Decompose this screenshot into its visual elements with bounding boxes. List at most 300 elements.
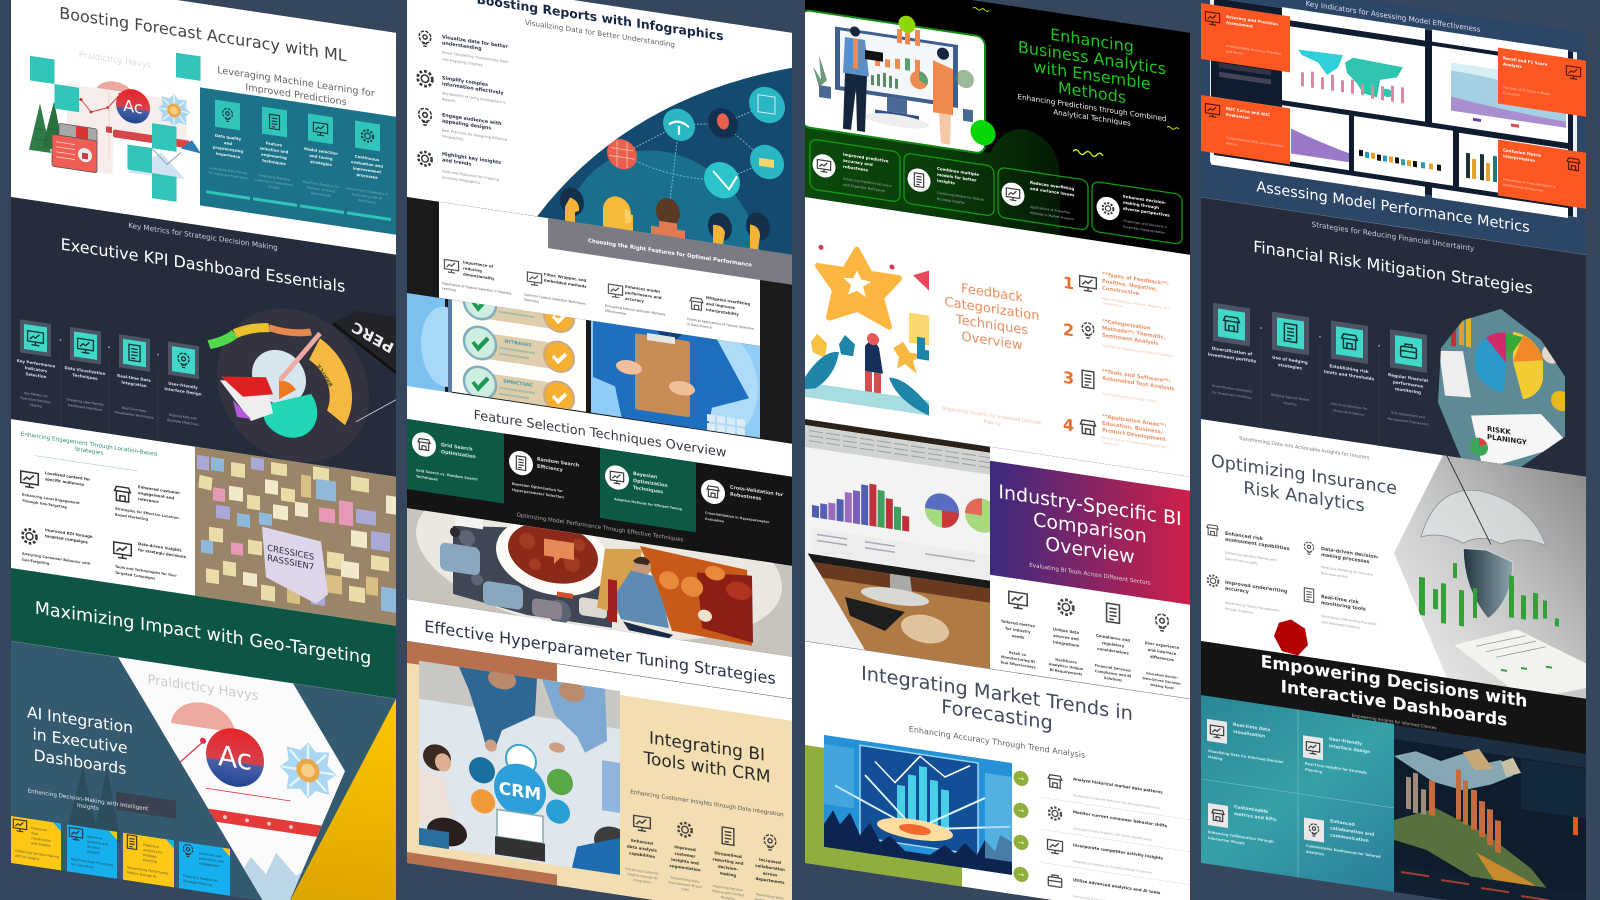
feature cards: Methods in Market Analysis [1030,211,1074,221]
cells: Bayesian [633,471,658,481]
sector columns: Solutions [1104,676,1122,683]
benefits list: Data-driven decision- [1321,546,1379,561]
benefits list: Strategies for Effective Location- [115,507,180,520]
technique items: Importance of Feature Selection in Machine [442,281,511,296]
panel: teal steps: Techniques [357,198,376,205]
numbered list: Education, Business, [1102,421,1163,436]
subtitle: Visualizing Data for Better Understanding [525,18,675,49]
benefits list: specific audiences [45,476,85,487]
KPI columns: Real-Time Data [122,406,146,413]
strategy columns: Insurance Solutions for [1331,401,1368,411]
photo: infographic plate with man [407,508,792,657]
numbered list: Methods**: Thematic, [1102,326,1166,341]
panel: teal steps: Data quality [215,133,242,142]
panel: teal steps: Feature [266,140,283,148]
image: checklist: SMRICTOAC [503,378,534,389]
illustration: Praldicticy Havys [79,50,152,71]
technique items: Practical Applications of Feature Selection [687,317,754,331]
feature cards [810,139,1182,245]
feature boxes: support [87,849,100,855]
trend list: Analyzing Consumer Behavior for Accurate Predictions [1073,793,1160,810]
cells: Grid Search [441,442,473,453]
cells: Techniques [633,485,663,495]
teal benefits grid: Enhanced [1330,818,1355,828]
cells: Optimization [633,478,668,489]
slide: Optimizing Insurance Risk Analytics [1201,419,1596,710]
image: checklist [407,293,586,412]
sector columns: and interface [1148,647,1177,656]
feature columns: reporting and [712,856,744,866]
title: in Executive [32,724,128,757]
sector columns: Data-Driven Decision- [1142,676,1182,686]
KPI columns: Key Performance [17,358,56,369]
gauge illustration: BRATCE [316,363,335,387]
slide: Financial Risk Mitigation Strategies [1201,197,1586,485]
arrow bullets: → [1018,773,1024,783]
title: Optimizing Insurance [1211,452,1397,499]
slide: Executive KPI Dashboard Essentials [11,197,397,477]
cells: Evaluation [705,517,725,524]
numbered list: **Tools and Software**: [1102,369,1171,385]
illustration wedge: Ac [218,739,252,777]
title: Methods [1058,78,1126,107]
strategy columns: limits and thresholds [1324,369,1375,382]
strategy columns: Regular financial [1388,372,1429,383]
benefits list: for strategic decisions [138,547,187,559]
benefit list: Simplify complex [442,75,489,88]
arrow bullets [1014,770,1028,883]
benefits list [1207,524,1379,634]
numbered list: Sentiment Analysis [1102,333,1158,347]
gradient title panel: Overview [1045,532,1135,568]
feature columns: Improving Decision [713,884,743,892]
technique items: Overview [524,298,539,304]
cells: Cross-Validation for [730,484,784,499]
panel: teal steps: improvement [353,165,381,175]
feature columns: collaboration [755,863,785,872]
title: Interactive Dashboards [1281,677,1507,731]
trend list: Utilize advanced analytics and AI tools [1073,877,1161,895]
feature cards: Applications of Ensemble [1030,205,1070,215]
panel: teal steps: strategies [310,159,333,167]
benefit list: into Engaging Graphics [442,57,483,67]
strategy columns [1208,302,1429,453]
photo: CRM meeting: CRM [499,779,541,805]
KPI columns: Dashboard Interfaces [68,403,102,412]
slide: Feature Selection Techniques Overview [407,197,792,477]
title: Forecasting [941,695,1053,735]
strategy columns: Diversification of [1212,346,1252,357]
KPI columns: Making [30,403,42,409]
numbered list [1063,266,1175,455]
technique items: interpretability [706,307,739,317]
benefit list: Visual Storytelling: Transforming Data [442,50,508,64]
feature boxes: analytics for [143,848,163,855]
benefits list: Tools and Technologies for Geo- [115,565,178,578]
cells: Adaptive Methods for Efficient Tuning [614,497,683,511]
sector columns: integrations [1053,639,1080,648]
technique items: in Data Science [687,322,712,330]
benefits list: Localized content for [45,470,90,482]
teal benefits grid: Customizable [1234,804,1268,815]
title: with Ensemble [1033,57,1151,93]
sector columns: regulatory [1102,640,1125,648]
KPI columns: Integration [121,380,147,388]
yellow corner [288,683,396,900]
cells: Bayesian Optimization for [512,482,563,493]
panel: teal steps [200,87,396,235]
orange metric cards: Confusion Matrix [1503,147,1542,158]
dashboard image [1210,0,1577,219]
KPI columns: Selection [26,371,47,379]
benefits list: engagement and [138,490,174,501]
subtitle: Strategies for Reducing Financial Uncertainty [1312,220,1475,253]
image: umbrella, shield and report [1391,448,1596,710]
benefits list: Through Geo-Targeting [22,499,67,509]
sector columns: for industry [1005,626,1031,634]
illustration: star and person [805,242,929,416]
numbered list: Positive, Negative, [1102,279,1157,293]
panel: teal steps: Overcoming Challenges in [346,186,388,197]
panel: teal steps: Dynamic Forecast [307,185,336,194]
sector columns: sources and [1053,633,1079,642]
sector columns: Tailored metrics [1001,618,1036,629]
feature cards: Improved predictive [843,152,889,164]
benefits list: relevance [138,496,159,504]
photo: data burst with crowd [824,735,1012,875]
KPI columns: User-friendly [168,381,198,390]
image: risk planning pie chart [1431,292,1571,482]
feature columns: Increased [759,857,781,865]
orange metric cards [1201,3,1586,209]
numbered list: 1 [1063,273,1074,293]
panel: teal steps: engineering [261,152,287,160]
strategy columns: strategies [1278,362,1303,371]
title: Techniques [955,313,1028,338]
orange metric cards: Interpretation [1503,153,1535,163]
subtitle: Organizing Insights for Improved Decision [942,406,1042,427]
teal benefits grid: collaboration and [1330,825,1374,838]
trend list: Monitor current consumer behavior shifts [1073,809,1168,828]
numbered list: 3 [1063,368,1074,388]
subtitle: Enhancing Decision-Making with Intelligent [28,789,149,813]
technique items: Enhances model [625,284,660,294]
feature columns: customer [674,851,696,859]
teal benefits grid [1201,695,1394,892]
title: Risk Analytics [1243,478,1365,517]
title: Dashboards [34,745,126,778]
benefits list [21,466,187,586]
illustration wedge [118,657,345,900]
feature columns: CRM [681,887,689,892]
orange metric cards: Metrics [1226,141,1238,147]
KPI columns: Visualization Techniques [115,410,154,420]
numbered list: **Application Areas**: [1102,414,1167,429]
teal benefits grid: Real-Time Insights for Strategic [1305,762,1367,775]
feature cards: robustness [843,164,869,173]
panel: teal steps: Real-Time Analytics for [303,180,340,189]
benefit list: Visualize data for better [442,34,508,50]
teal checker squares [30,52,200,202]
feature boxes: analytics and [87,839,108,847]
numbered list: 2 [1063,320,1074,340]
numbered list: Best Practices for Implementing Feedback [1102,436,1169,450]
title: AI Integration [27,702,133,737]
numbered list: Categories [1102,441,1119,447]
panel: teal steps: Integrating Machine [258,173,290,182]
KPI columns: Techniques [72,372,98,381]
panel: teal steps: importance [216,151,241,159]
strategy columns: Risk Assessment and [1391,411,1425,420]
feature columns: across [763,870,778,878]
feature boxes: and insights [31,841,51,848]
benefits list: Enhancing Local Engagement [22,493,80,505]
feature cards: Enhances decision- [1123,194,1166,205]
strategy columns: Financial Protection [1333,408,1365,417]
orange metric cards: Evaluation [1503,91,1520,97]
feature boxes: engagement [199,861,220,868]
panel: teal steps: techniques [262,158,287,166]
title: Empowering Decisions with [1261,652,1527,712]
KPI columns: Key Metrics for [24,391,49,399]
cells: Efficiency [537,464,564,473]
panel: teal steps: Leveraging Data Mining [209,166,247,175]
feature cards: Ensemble Implementation [1123,225,1165,235]
feature columns: Integration [633,878,651,885]
benefit list: information effectively [442,81,504,97]
image: risk planning pie chart: PLANINGY [1487,432,1528,447]
title: Financial Risk Mitigation Strategies [1253,237,1533,298]
strategy columns: Establishing risk [1329,363,1369,374]
panel: teal steps: Continuous [355,154,380,162]
numbered list: Methods for Organizing Feedback Effectively [1102,344,1173,358]
benefits list: Real-time risk [1321,594,1359,606]
numbered list: Automated Text Analysis [1102,376,1175,392]
technique items: Mitigates overfitting [706,295,750,306]
arrow bullets: → [1018,805,1024,815]
feature columns: Streamlined [714,850,742,859]
benefits list: monitoring tools [1321,600,1366,613]
accent circles [898,0,1179,175]
feature boxes: Improved user [199,851,223,859]
teal benefits grid: Analytics [1306,850,1324,856]
orange metric cards: Accuracy and Precision [1226,14,1278,27]
panel: teal steps: preprocessing [213,144,243,154]
strategy columns: monitoring [1395,386,1421,395]
feature boxes: visualization [31,836,51,843]
benefits list: Targeted Campaigns [115,571,155,581]
feature boxes: for Executives [71,862,94,869]
panel: teal steps: and tuning [309,153,333,161]
teal benefits grid: communication [1330,832,1369,844]
benefits list: Enhanced risk [1225,531,1264,542]
gauge illustration [208,308,396,462]
teal benefits grid: Visualizing Data for Informed Decision [1208,749,1284,764]
arrow bullets: → [1018,869,1024,879]
title band [407,386,792,477]
title: Enhancing [1050,25,1134,56]
technique items [442,258,754,330]
sector columns: Healthcare [1055,658,1077,665]
KPI columns: Data Visualization [65,365,106,376]
illustration wedge: Praldicticy Havys [147,673,259,704]
title: Boosting Forecast Accuracy with ML [59,3,347,65]
subtitle: Strategies [75,447,103,457]
teal benefits grid: visualization [1233,729,1265,740]
orange metric cards: ROC Curve and AUC [1226,106,1270,117]
benefits list: Optimizing Underwriting Processes [1321,614,1377,626]
subtitle: Empowering Insights for Informed Choices [1352,713,1436,730]
subtitle: Enhancing Customer Insights through Data Integration [630,790,784,819]
sector columns: Compliance and [1096,633,1130,643]
numbered list: 4 [1063,415,1074,435]
technique items: Evaluating Feature Selection Methods [605,304,666,317]
feature columns: making [720,870,736,878]
technique items: Embedded methods [544,278,587,289]
sector columns: Manufacturing BI [1001,655,1035,664]
photo: CRM meeting [419,657,630,876]
subtitle: Enhancing Predictions through Combined [1018,92,1166,123]
title: Assessing Model Performance Metrics [1256,178,1530,236]
feature columns: departments [755,876,785,885]
technique items: and improves [706,301,736,310]
illustration: Ac [123,96,143,118]
slide: Feedback Categorization Techniques Overview [805,197,1190,477]
feature boxes: Real-Time Data Processing [71,857,113,867]
strategy columns: for Investment Portfolios [1212,390,1252,400]
feature columns: Enhanced [631,838,653,846]
feature columns: segmentation [669,863,701,873]
orange metric cards: Comprehensive ROC and Evaluation [1226,136,1284,148]
illustration [29,51,200,179]
KPI columns: Interface Design [164,386,202,397]
KPI columns: Designing User-friendly [66,397,104,407]
feature cards: diverse perspectives [1123,206,1170,218]
teal benefits grid: Planning [1305,768,1323,774]
feature cards: models for better [937,172,977,183]
sector columns: Tool Effectiveness [1000,660,1036,670]
cells: Hyperparameter Selection [512,488,564,500]
teal benefits grid: Customizable Dashboards for Tailored [1306,844,1381,859]
benefit list: appealing designs [442,118,491,132]
teal benefits grid: Interactive Visuals [1208,836,1245,846]
feature columns: decision- [718,864,738,872]
benefit list: Highlight key insights [442,151,501,166]
feature boxes: Predictive Insights for [183,874,218,883]
orange metric cards: Recall and F1 Score [1503,55,1548,67]
feature boxes: Real-time [87,834,102,841]
title: Overview [961,330,1023,354]
sector columns: needs [1012,633,1025,640]
subtitle: Enhancing Accuracy Through Trend Analysis [909,725,1085,760]
slide: Maximizing Impact with Geo-Targeting [11,419,398,699]
title: Business Analytics [1018,37,1166,78]
KPI columns: Real-time Data [117,373,151,383]
image: risk planning pie chart: RISKK [1487,424,1511,437]
benefit list [418,30,508,189]
strategy columns: Use of hedging [1272,355,1308,365]
orange metric cards: Evaluation [1226,112,1250,120]
sticky-note photo: RASSSIEN7 [267,554,314,573]
gradient title panel [990,461,1190,605]
gradient title panel: Evaluating BI Tools Across Different Sectors [1029,563,1151,587]
feature columns: Making with Unified [712,889,744,898]
KPI columns: Aligning KPIs with [169,413,197,421]
image: checklist: NTTRAGES [505,339,531,349]
numbered list: **Types of Feedback**: [1102,272,1169,288]
cells: Techniques [416,474,438,482]
benefit list: Engage audience with [442,112,502,127]
orange metric cards: Importance of Cross-Validation in [1503,177,1556,189]
technique items: Effectiveness [605,309,627,316]
strategy columns: Hedging Against Market [1271,392,1310,402]
teal benefits grid: Real-time data [1233,722,1270,733]
arrow bullets: → [1018,837,1024,847]
slide: Boosting Reports with Infographics [407,0,792,255]
technique items: Learning [442,286,456,292]
technique items: performance and [625,290,662,300]
feature columns: Streamlining Data [671,876,699,884]
numbered list: **Categorization [1102,319,1151,332]
benefits list: Geo-Targeting [22,558,50,566]
technique items: accuracy [625,296,644,304]
cells: Grid Search vs. Random Search [416,468,478,482]
sector columns: Compliance and BI [1095,669,1131,678]
benefits list: through Analytics [1225,607,1253,615]
title: Executive KPI Dashboard Essentials [61,235,345,296]
panel: teal steps: Model selection [304,146,338,156]
numbered list: Tools for Analyzing Feedback Data [1101,391,1157,404]
panel: teal steps: Adjustments [311,191,331,198]
sector columns: Retail vs. [1009,651,1027,657]
benefits list: Risk Assessment [1321,571,1348,579]
feature cards: accuracy and [843,158,873,167]
sector columns: Unique data [1053,626,1079,635]
benefit list: and trends [442,157,471,168]
slide: Assessing Model Performance Metrics [1201,0,1586,255]
feature columns: capabilities [629,850,656,859]
strategy columns: Diversification Strategies [1212,384,1252,394]
feature cards: Challenges and Solutions in [1123,219,1167,229]
teal benefits grid: Making [1208,755,1223,761]
feature cards: Enhancing Predictive Accuracy [843,177,892,188]
feature cards: making through [1123,200,1159,210]
KPI columns [17,319,202,448]
feature boxes [11,816,230,896]
trend list: Analyze historical market data patterns [1073,776,1163,795]
title: Integrating BI [649,728,765,766]
feature columns [625,812,785,900]
feature columns: Enhancing Customer [625,867,659,876]
title: Feedback [961,281,1023,306]
benefits list: accuracy [1225,586,1250,595]
slide: Enhancing Business Analytics with Ensemble Methods [801,0,1190,255]
subtitle: Transforming Data into Actionable Insights for Insurers [1238,436,1370,461]
feature cards: insights [937,178,956,186]
benefit list: understanding [442,40,482,52]
panel: teal steps: Forecasting with AI [352,192,382,201]
title band: Effective Hyperparameter Tuning Strategies [424,617,776,688]
image: person with clipboard [591,320,760,438]
slide: Effective Hyperparameter Tuning Strategies [407,419,792,699]
benefits list: Enhancing Decision-Making with [1225,551,1277,562]
benefit list: Infographics [442,134,464,141]
teal benefits grid: Enhancing Collaboration Through [1208,830,1274,844]
orange metric cards: Analysis [1503,61,1522,69]
panel: teal steps: for Improved Predictions [208,171,248,181]
illustration: analysts and monitor [801,9,985,154]
feature cards: and variance issues [1030,186,1075,198]
